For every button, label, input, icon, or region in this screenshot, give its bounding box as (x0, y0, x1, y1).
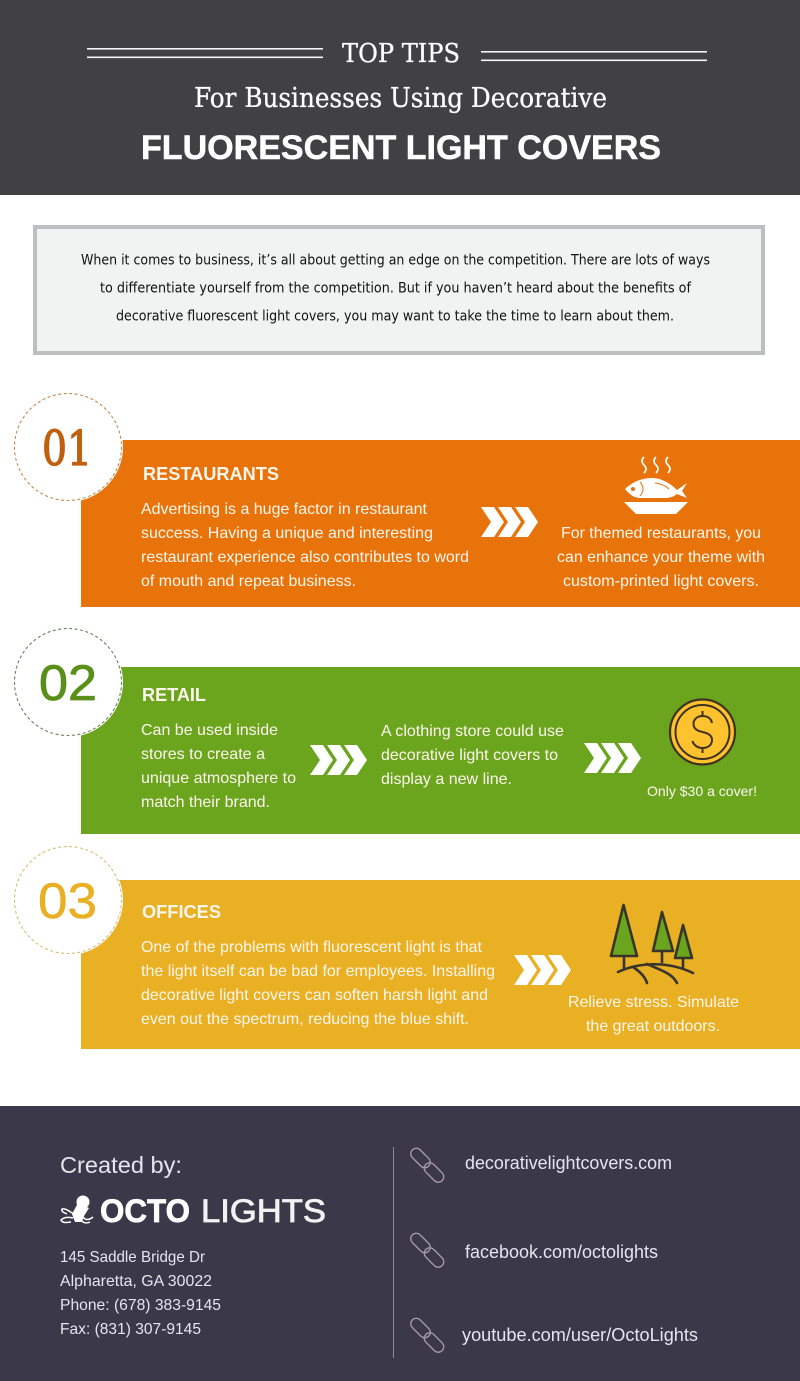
address text (60, 1249, 221, 1338)
arrow: chevrons (310, 745, 367, 775)
offices body text: the light itself can be bad for employees. Installing (141, 963, 495, 980)
address text: Alpharetta, GA 30022 (60, 1273, 212, 1290)
restaurants side text: For themed restaurants, you (561, 525, 761, 542)
offices body text (141, 939, 495, 1028)
panel: offices (13, 845, 800, 1049)
number badge 03: 03 (38, 873, 97, 929)
heading: retail: RETAIL (142, 685, 206, 705)
restaurants body text: success. Having a unique and interesting (141, 525, 433, 542)
number badge 01: 01 (42, 421, 92, 477)
offices side text (568, 994, 739, 1035)
logo: octo lights: OCTO (100, 1193, 190, 1229)
restaurants side text (557, 525, 765, 590)
icon: dollar coin (670, 700, 735, 764)
title: subtitle: For Businesses Using Decorative (194, 83, 607, 114)
intro text: When it comes to business, it’s all about getting an edge on the competition. There are lots of ways (81, 252, 710, 268)
restaurants side text: can enhance your theme with (557, 549, 765, 566)
title: top tips: TOP TIPS (342, 39, 460, 69)
restaurants side text: custom-printed light covers. (563, 573, 759, 590)
offices body text: One of the problems with fluorescent light is that (141, 939, 483, 956)
header rule left (87, 48, 323, 58)
restaurants body text (141, 501, 469, 590)
retail body text: Can be used inside (141, 722, 278, 739)
retail middle text: decorative light covers to (381, 747, 558, 764)
created by label: Created by: (60, 1152, 182, 1178)
icon: fish on plate (624, 457, 688, 514)
retail middle text: display a new line. (381, 771, 512, 788)
link: website (408, 1146, 672, 1185)
link: facebook (408, 1231, 658, 1270)
header rule right (481, 51, 707, 61)
offices side text: the great outdoors. (586, 1018, 720, 1035)
restaurants body text: restaurant experience also contributes to word (141, 549, 469, 566)
restaurants body text: of mouth and repeat business. (141, 573, 356, 590)
panel: retail (13, 627, 800, 834)
link: facebook: facebook.com/octolights (465, 1242, 658, 1262)
arrow: chevrons (584, 743, 641, 773)
number badge 02 (13, 627, 123, 737)
arrow: chevrons (514, 955, 571, 985)
offices body text: decorative light covers can soften harsh light and (141, 987, 488, 1004)
retail middle text (381, 723, 564, 788)
address text: Phone: (678) 383-9145 (60, 1297, 221, 1314)
coin caption: Only $30 a cover! (647, 783, 757, 799)
heading: restaurants: RESTAURANTS (143, 464, 279, 484)
intro text (81, 252, 710, 324)
logo: octo lights (61, 1193, 326, 1229)
offices side text: Relieve stress. Simulate (568, 994, 739, 1011)
retail body text: unique atmosphere to (141, 770, 296, 787)
icon: trees and hills (611, 905, 693, 983)
retail body text: stores to create a (141, 746, 265, 763)
link: youtube: youtube.com/user/OctoLights (462, 1325, 698, 1345)
header band (0, 0, 800, 195)
icon: octopus (61, 1196, 93, 1223)
address text: Fax: (831) 307-9145 (60, 1321, 201, 1338)
logo: octo lights: LIGHTS (201, 1193, 326, 1229)
intro box (35, 227, 763, 353)
intro text: decorative fluorescent light covers, you may want to take the time to learn about them. (116, 308, 674, 324)
heading: offices: OFFICES (142, 902, 221, 922)
restaurants body text: Advertising is a huge factor in restaurant (141, 501, 428, 518)
number badge 02: 02 (39, 655, 97, 711)
offices body text: even out the spectrum, reducing the blue shift. (141, 1011, 469, 1028)
footer band (0, 1106, 800, 1381)
link: youtube (408, 1316, 698, 1355)
panel: restaurants (13, 392, 800, 607)
arrow: chevrons (481, 507, 538, 537)
retail middle text: A clothing store could use (381, 723, 564, 740)
number badge 03 (13, 845, 123, 955)
title: main: FLUORESCENT LIGHT COVERS (141, 129, 661, 167)
retail body text: match their brand. (141, 794, 270, 811)
retail body text (141, 722, 296, 811)
number badge 01 (13, 392, 123, 502)
link: website: decorativelightcovers.com (465, 1153, 672, 1173)
address text: 145 Saddle Bridge Dr (60, 1249, 206, 1266)
intro text: to differentiate yourself from the competition. But if you haven’t heard about the benefits of (100, 280, 692, 296)
